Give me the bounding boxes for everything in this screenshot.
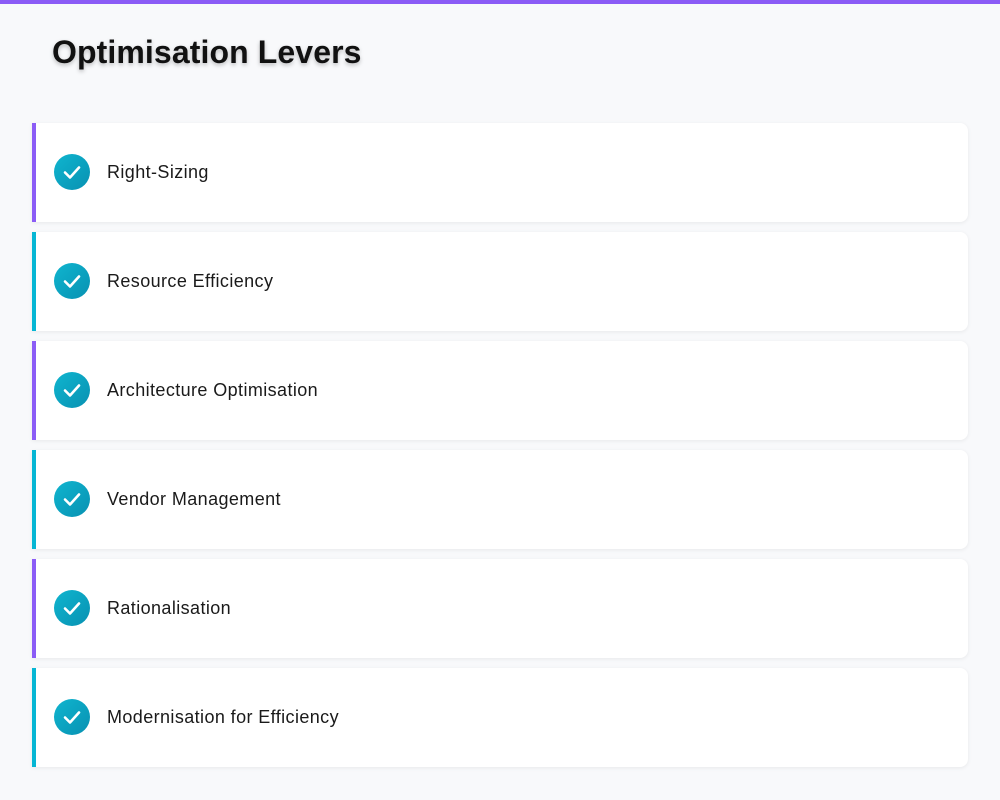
- label: Architecture Optimisation: [107, 380, 318, 400]
- icon: check: [54, 590, 90, 626]
- label: Right-Sizing: [107, 162, 209, 182]
- icon: check: [54, 699, 90, 735]
- icon: check: [54, 372, 90, 408]
- label: Vendor Management: [107, 489, 281, 509]
- card: Right-Sizing: [32, 123, 968, 222]
- label: Resource Efficiency: [107, 271, 273, 291]
- label: Rationalisation: [107, 598, 231, 618]
- title: Optimisation Levers: [52, 34, 362, 70]
- card: Modernisation for Efficiency: [32, 668, 968, 767]
- card: Architecture Optimisation: [32, 341, 968, 440]
- icon: check: [54, 481, 90, 517]
- card: Rationalisation: [32, 559, 968, 658]
- label: Modernisation for Efficiency: [107, 707, 339, 727]
- icon: check: [54, 263, 90, 299]
- icon: check: [54, 154, 90, 190]
- card: Vendor Management: [32, 450, 968, 549]
- card: Resource Efficiency: [32, 232, 968, 331]
